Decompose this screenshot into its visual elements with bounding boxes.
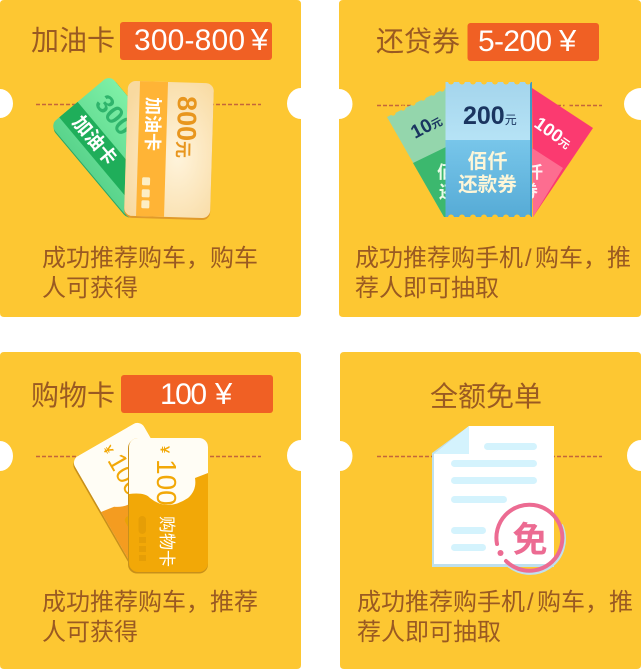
green card: 加油卡 — [68, 112, 121, 170]
front card: 100 — [151, 459, 182, 506]
pink voucher: 100元 — [531, 113, 576, 153]
value badge: 100 — [160, 378, 207, 411]
value badge — [468, 23, 599, 61]
description: 购车，推 — [537, 589, 633, 616]
description: 购车，推 — [535, 245, 631, 272]
green voucher: 10元 — [407, 110, 446, 143]
description: 成功推荐购车，购车 — [42, 245, 258, 272]
heading: 加油卡 — [31, 25, 115, 56]
front card: 购物卡 — [157, 516, 176, 567]
icon: document with stamp — [432, 426, 564, 573]
document — [432, 426, 554, 567]
blue voucher: 200元 — [463, 102, 517, 130]
heading: 全额免单 — [430, 381, 542, 412]
green voucher: 佰 — [437, 163, 454, 182]
back card — [73, 422, 150, 562]
panel: shopping card — [0, 352, 301, 669]
value badge: ¥ — [214, 376, 233, 411]
value badge: 300-800 — [134, 24, 245, 57]
description: 成功推荐购手机 — [357, 589, 525, 616]
description: 成功推荐购车，推荐 — [42, 589, 258, 616]
description: 成功推荐购手机 — [355, 245, 523, 272]
description: 人可获得 — [42, 619, 138, 646]
value badge: ¥ — [250, 22, 269, 57]
pink voucher: 仟 — [526, 163, 543, 182]
back card: 100 — [102, 448, 149, 501]
heading: 还贷券 — [376, 26, 460, 57]
description: 荐人即可抽取 — [355, 275, 499, 302]
description: 人可获得 — [42, 275, 138, 302]
icon: shopping cards — [70, 420, 208, 574]
description: 荐人即可抽取 — [357, 619, 501, 646]
green card: 300 — [89, 89, 140, 141]
pink voucher — [521, 85, 593, 217]
green voucher — [387, 86, 456, 217]
panel background — [339, 0, 641, 317]
back card: ¥ — [100, 443, 117, 457]
blue voucher — [446, 78, 532, 220]
icon: fuel cards: 加油卡 — [142, 97, 163, 151]
value badge — [120, 22, 272, 60]
front card — [128, 438, 208, 574]
cream card — [124, 81, 214, 220]
pink voucher: 券 — [521, 181, 538, 201]
value badge — [121, 375, 273, 413]
panel background — [0, 0, 301, 317]
panel: fuel card — [0, 0, 301, 317]
value badge: 5-200 — [478, 25, 552, 58]
panel: loan repayment voucher — [339, 0, 641, 317]
blue voucher: 佰仟 — [468, 150, 508, 173]
value badge: ¥ — [558, 23, 577, 58]
icon: fuel cards — [49, 75, 214, 221]
green card — [53, 78, 130, 218]
icon: fuel cards: 800 元 — [171, 96, 202, 158]
green voucher: 还 — [439, 183, 456, 202]
stamp: 免 — [512, 521, 548, 560]
icon: vouchers fan — [387, 78, 593, 220]
description: / — [525, 245, 532, 272]
panel background — [340, 352, 641, 669]
description: / — [527, 589, 534, 616]
blue voucher: 还款券 — [458, 173, 517, 196]
panel background — [0, 352, 301, 669]
panel: full refund — [340, 352, 641, 669]
front card: ¥ — [158, 446, 172, 454]
stamp — [496, 505, 564, 573]
heading: 购物卡 — [31, 380, 115, 411]
